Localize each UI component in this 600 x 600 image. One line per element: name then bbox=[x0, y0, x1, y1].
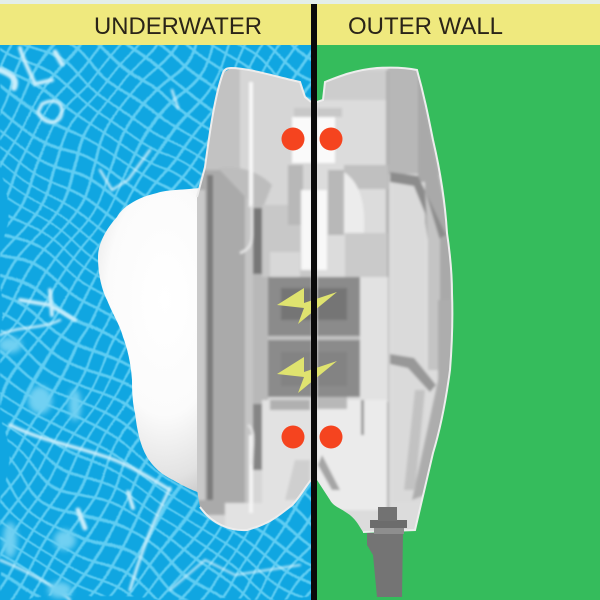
white plate bbox=[317, 117, 335, 163]
power cable connector bbox=[367, 507, 407, 597]
shading bands bbox=[388, 68, 439, 175]
white rail bbox=[249, 82, 253, 207]
housing: right half bbox=[317, 68, 452, 532]
icon: lightning bolt upper bbox=[277, 288, 337, 324]
electronics block: left bbox=[268, 277, 312, 397]
divider line bbox=[311, 4, 317, 600]
header bar: yellow bbox=[0, 4, 600, 45]
marker: red dot bottom right bbox=[320, 426, 342, 448]
marker: red dot top left bbox=[282, 128, 304, 150]
heading: underwater: UNDERWATER bbox=[94, 13, 262, 40]
housing outline bbox=[197, 68, 452, 532]
housing: left half bbox=[197, 69, 311, 530]
electronics block: right bbox=[317, 277, 360, 397]
panel: outer wall green background bbox=[312, 45, 600, 600]
heading: outer wall: OUTER WALL bbox=[348, 13, 503, 40]
bulb: white lens underwater bbox=[98, 188, 200, 493]
panel: underwater pool background bbox=[0, 20, 330, 600]
white plate bbox=[292, 117, 312, 163]
caustics bbox=[0, 48, 300, 600]
top strip bbox=[0, 0, 600, 5]
marker: red dot top right bbox=[320, 128, 342, 150]
light patches bbox=[0, 337, 81, 598]
shading bands bbox=[206, 69, 240, 170]
icon: lightning bolt lower bbox=[277, 357, 337, 393]
marker: red dot bottom left bbox=[282, 426, 304, 448]
